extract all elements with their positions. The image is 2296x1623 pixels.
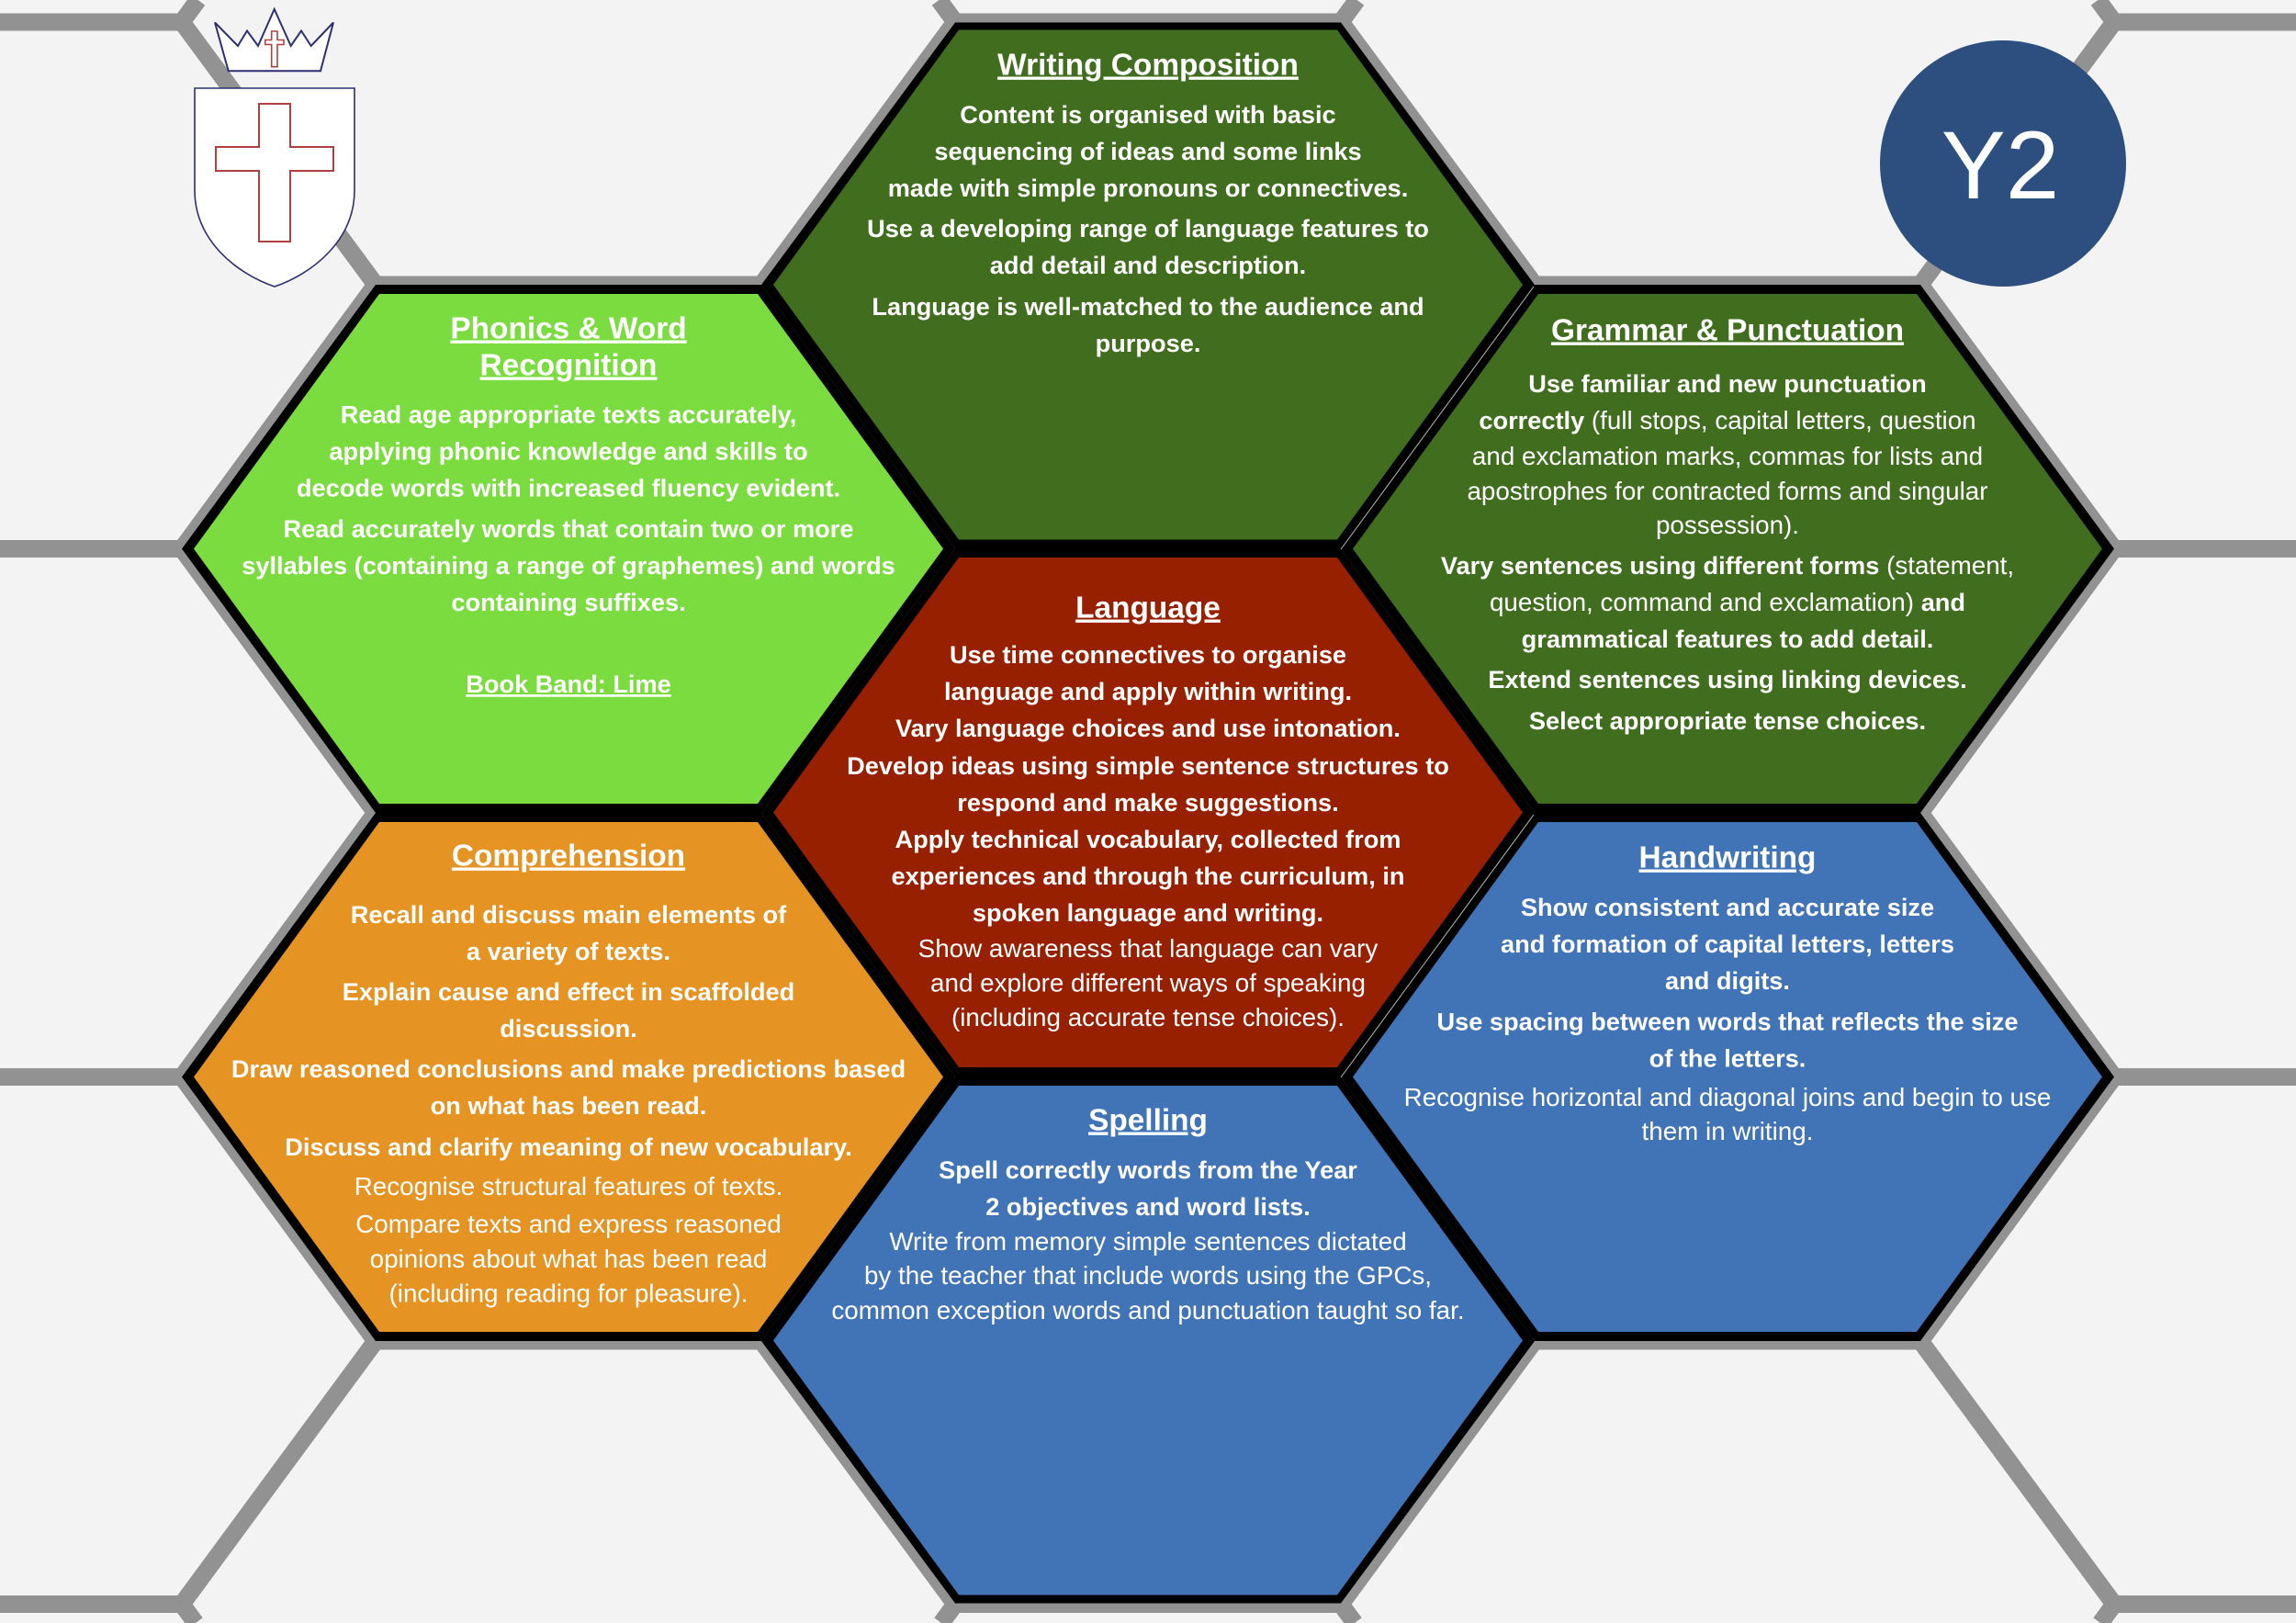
text block: Writing Composition objectives: Use a developing range of language features to xyxy=(867,214,1429,242)
hexagon: Phonics and Word Recognition xyxy=(194,294,943,804)
text block: Comprehension objectives: Recognise structural features of texts. xyxy=(355,1172,782,1200)
text block: Language objectives: experiences and through the curriculum, in xyxy=(892,862,1404,890)
text block: Grammar objectives: Use familiar and new punctuation xyxy=(1528,369,1927,398)
text block: Handwriting objectives: of the letters. xyxy=(1649,1043,1806,1073)
text block: Writing Composition objectives: sequencing of ideas and some links xyxy=(934,137,1362,165)
text block: Writing Composition objectives: purpose. xyxy=(1096,329,1200,357)
text block: Comprehension objectives: a variety of texts. xyxy=(467,937,670,965)
text block: Comprehension objectives: Compare texts and express reasoned xyxy=(355,1210,782,1238)
text block: Phonics objectives xyxy=(242,400,895,616)
hexagon: Handwriting xyxy=(1353,822,2102,1332)
heading: Spelling: Spelling xyxy=(1088,1104,1208,1137)
heading: Comprehension: Comprehension xyxy=(452,840,685,873)
panel: Handwriting xyxy=(1353,822,2102,1332)
hexagon: Comprehension xyxy=(194,822,943,1332)
text block: Grammar objectives: Vary sentences using different forms (statement, xyxy=(1441,551,2014,580)
text block: Phonics objectives: Read age appropriate texts accurately, xyxy=(341,400,796,428)
heading: Writing Composition: Writing Composition xyxy=(997,48,1299,83)
text block: Spelling objectives: 2 objectives and word lists. xyxy=(985,1192,1311,1221)
text block: Comprehension objectives: on what has been read. xyxy=(431,1091,706,1120)
text block: Comprehension objectives: Discuss and clarify meaning of new vocabulary. xyxy=(285,1133,852,1161)
text block: Language objectives: (including accurate tense choices). xyxy=(951,1003,1345,1031)
text block: Grammar objectives: question, command and exclamation) and xyxy=(1490,588,1965,616)
panel: Phonics and Word Recognition xyxy=(194,294,943,804)
text block: Language objectives: Vary language choices and use intonation. xyxy=(895,714,1401,742)
heading: Grammar and Punctuation: Grammar & Punctuation xyxy=(1551,314,1904,347)
text block: Writing Composition objectives: Content is organised with basic xyxy=(960,100,1336,129)
text block: Grammar objectives xyxy=(1441,369,2014,735)
icon: school crest xyxy=(195,9,355,287)
text block: Spelling objectives: by the teacher that include words using the GPCs, xyxy=(864,1261,1432,1290)
text block: Grammar objectives: Extend sentences using linking devices. xyxy=(1488,665,1967,693)
text block: Language objectives: and explore different ways of speaking xyxy=(930,968,1366,997)
badge: Y2 xyxy=(1880,40,2126,287)
text block: Language objectives: Use time connectives to organise xyxy=(950,640,1346,669)
text block: Comprehension objectives: discussion. xyxy=(500,1014,637,1043)
text block: Language objectives: Develop ideas using simple sentence structures to xyxy=(847,751,1449,780)
text block: Phonics objectives: applying phonic knowledge and skills to xyxy=(329,437,808,465)
hexagon: Grammar and Punctuation xyxy=(1353,294,2102,804)
text block: Language objectives: Apply technical vocabulary, collected from xyxy=(895,825,1401,853)
text block: Language objectives: spoken language and writing. xyxy=(973,898,1323,927)
text block: Handwriting objectives: Show consistent and accurate size xyxy=(1521,893,1934,921)
text block: Handwriting objectives: and formation of capital letters, letters xyxy=(1501,930,1954,958)
text block: Grammar objectives: Select appropriate tense choices. xyxy=(1529,706,1926,735)
text block: Phonics objectives: syllables (containing a range of graphemes) and words xyxy=(242,551,895,580)
heading: Handwriting: Handwriting xyxy=(1639,841,1816,874)
panel: Writing Composition xyxy=(773,29,1523,540)
text block: Phonics objectives: decode words with increased fluency evident. xyxy=(297,474,840,502)
icon: shield with cross xyxy=(195,88,355,287)
text block: Writing Composition objectives: Language is well-matched to the audience and xyxy=(872,292,1424,321)
text block: Handwriting objectives: them in writing. xyxy=(1642,1117,1813,1145)
panel: Grammar and Punctuation xyxy=(1353,294,2102,804)
hexagon: Writing Composition xyxy=(773,29,1523,540)
text block: Phonics objectives: Read accurately words that contain two or more xyxy=(284,514,853,543)
heading: Phonics and Word Recognition xyxy=(450,312,687,382)
heading: Phonics and Word Recognition: Recognition xyxy=(480,349,657,382)
text block: Spelling objectives: Spell correctly words from the Year xyxy=(939,1155,1357,1184)
text block: Grammar objectives: grammatical features to add detail. xyxy=(1522,625,1933,653)
text block: Language objectives xyxy=(847,640,1449,1031)
text block: Writing Composition objectives xyxy=(867,100,1429,357)
text block: Grammar objectives: correctly (full stops, capital letters, question xyxy=(1479,406,1976,434)
text block: Handwriting objectives: Recognise horizontal and diagonal joins and begin to use xyxy=(1404,1083,2051,1111)
panel: Language xyxy=(773,558,1523,1067)
heading: Phonics and Word Recognition: Phonics & Word xyxy=(450,312,687,345)
text block: Comprehension objectives: Recall and discuss main elements of xyxy=(351,900,787,929)
text block: Handwriting objectives xyxy=(1404,893,2051,1145)
text block: Comprehension objectives: Draw reasoned conclusions and make predictions based xyxy=(231,1054,906,1083)
hexagon: Spelling xyxy=(773,1086,1523,1595)
text block: Spelling objectives: Write from memory simple sentences dictated xyxy=(889,1227,1407,1256)
text: Book Band: Book Band: Lime xyxy=(466,670,671,698)
text block: Phonics objectives: containing suffixes. xyxy=(451,588,686,616)
text block: Grammar objectives: possession). xyxy=(1656,511,1799,539)
text block: Spelling objectives xyxy=(831,1155,1465,1324)
text block: Comprehension objectives: opinions about what has been read xyxy=(370,1245,767,1273)
text block: Grammar objectives: apostrophes for contracted forms and singular xyxy=(1467,477,1988,505)
text block: Comprehension objectives xyxy=(231,900,906,1308)
panel: Comprehension xyxy=(194,822,943,1332)
text block: Writing Composition objectives: add detail and description. xyxy=(990,251,1306,279)
text block: Handwriting objectives: Use spacing between words that reflects the size xyxy=(1436,1007,2019,1036)
text block: Writing Composition objectives: made with simple pronouns or connectives. xyxy=(888,174,1408,202)
text block: Language objectives: respond and make suggestions. xyxy=(957,788,1339,817)
hexagon: Language xyxy=(773,558,1523,1067)
heading: Language: Language xyxy=(1075,592,1221,625)
text block: Language objectives: Show awareness that language can vary xyxy=(918,934,1378,963)
text block: Handwriting objectives: and digits. xyxy=(1665,966,1790,995)
badge: Y2: Y2 xyxy=(1941,112,2059,220)
icon: crown xyxy=(215,9,333,71)
text block: Comprehension objectives: (including reading for pleasure). xyxy=(389,1279,748,1308)
text block: Language objectives: language and apply within writing. xyxy=(944,677,1352,705)
text block: Spelling objectives: common exception words and punctuation taught so far. xyxy=(831,1296,1465,1324)
text block: Grammar objectives: and exclamation marks, commas for lists and xyxy=(1472,442,1983,470)
panel: Spelling xyxy=(773,1086,1523,1595)
text block: Comprehension objectives: Explain cause and effect in scaffolded xyxy=(343,977,794,1006)
